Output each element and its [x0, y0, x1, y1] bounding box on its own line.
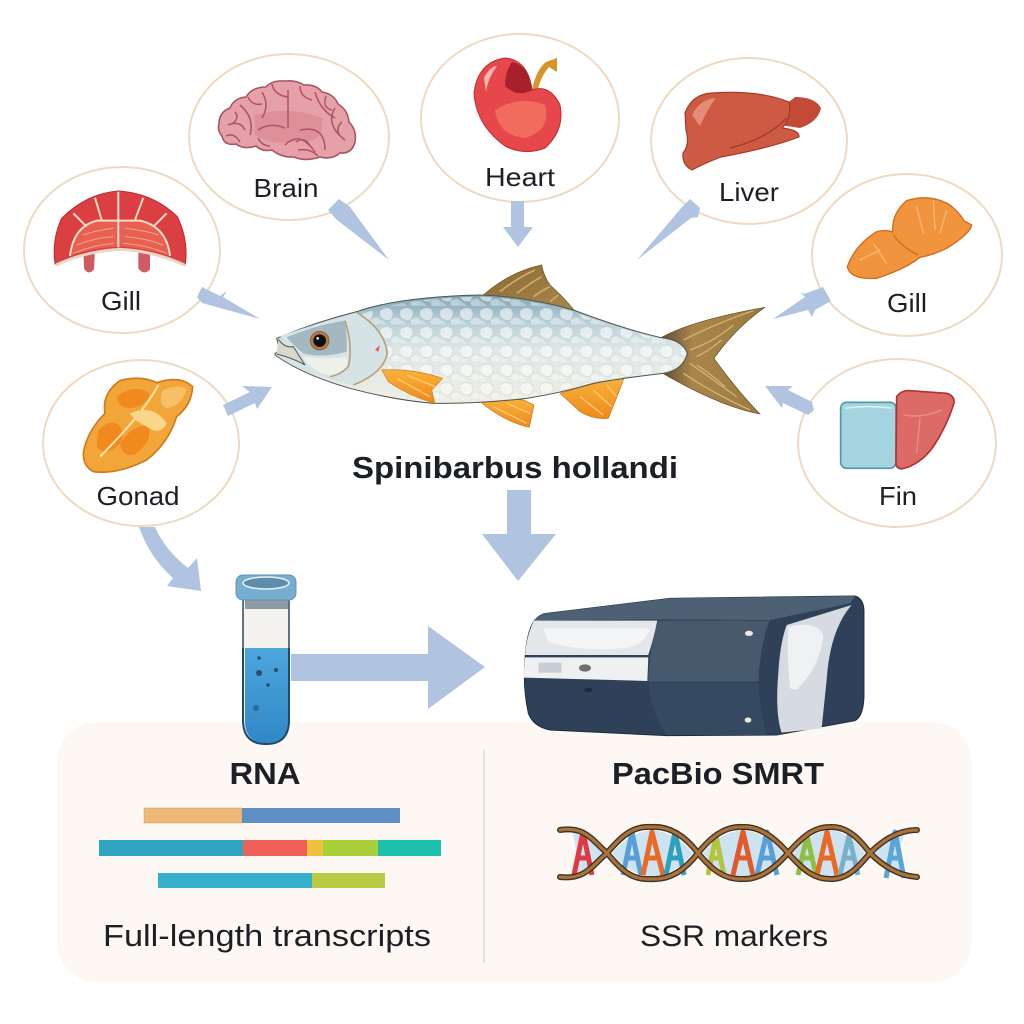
icon: red gill arch	[54, 191, 186, 272]
chart: transcript bars	[99, 808, 441, 888]
panel: liver	[651, 58, 847, 224]
anal fin	[560, 378, 624, 419]
icon: brown-red liver	[683, 92, 821, 170]
arrow: right gill to fish	[773, 287, 831, 319]
arrow: left gill to fish	[197, 287, 260, 319]
icon: orange lobed organ	[847, 198, 972, 279]
panel: gill right	[812, 174, 1002, 336]
arrow: gonad to fish	[223, 386, 272, 416]
arrow: fin to fish	[765, 386, 814, 415]
panel: heart	[421, 34, 619, 202]
panel: fin	[798, 359, 996, 527]
body	[275, 295, 687, 403]
gill cover and head	[276, 312, 387, 385]
icon: orange gonad	[83, 378, 193, 472]
label: RNA heading: RNA	[230, 756, 300, 791]
tail fin	[662, 307, 765, 414]
dorsal fin	[483, 265, 574, 310]
label: SSR markers: SSR markers	[640, 920, 828, 953]
label: Gill	[887, 288, 927, 318]
arrow: brain to fish	[328, 199, 389, 260]
arrow: fish to sequencer	[482, 490, 556, 581]
label: Brain	[254, 173, 318, 203]
icon: DNA double helix with SSR bases	[560, 827, 917, 879]
title: species name: Spinibarbus hollandi	[352, 450, 678, 485]
bottom summary panel	[57, 722, 972, 982]
label: Gill	[101, 286, 141, 316]
icon: pink brain	[218, 81, 355, 160]
fish illustration	[275, 265, 765, 427]
arrow: RNA to sequencer	[291, 626, 485, 709]
icon: PacBio sequencer machine	[523, 596, 864, 736]
panel: gonad	[43, 360, 239, 526]
panel: gill left	[24, 167, 220, 333]
label: full-length transcripts: Full-length transcripts	[103, 918, 431, 953]
label: Gonad	[96, 481, 180, 511]
label: Fin	[879, 481, 917, 511]
arrow: gonad to RNA tube	[139, 527, 201, 591]
label: PacBio SMRT heading: PacBio SMRT	[612, 756, 824, 791]
pectoral fin	[382, 370, 443, 403]
icon: RNA test tube	[236, 575, 296, 748]
label: Heart	[485, 162, 556, 192]
eye	[310, 331, 329, 350]
arrow: liver to fish	[637, 199, 700, 260]
icon: blue and red fin tissue	[841, 391, 954, 469]
arrow: heart to fish	[503, 201, 533, 247]
panel: brain	[189, 54, 389, 220]
scale texture	[360, 297, 686, 401]
ventral fin	[478, 399, 534, 427]
icon: red heart	[474, 58, 561, 152]
label: Liver	[719, 177, 779, 207]
